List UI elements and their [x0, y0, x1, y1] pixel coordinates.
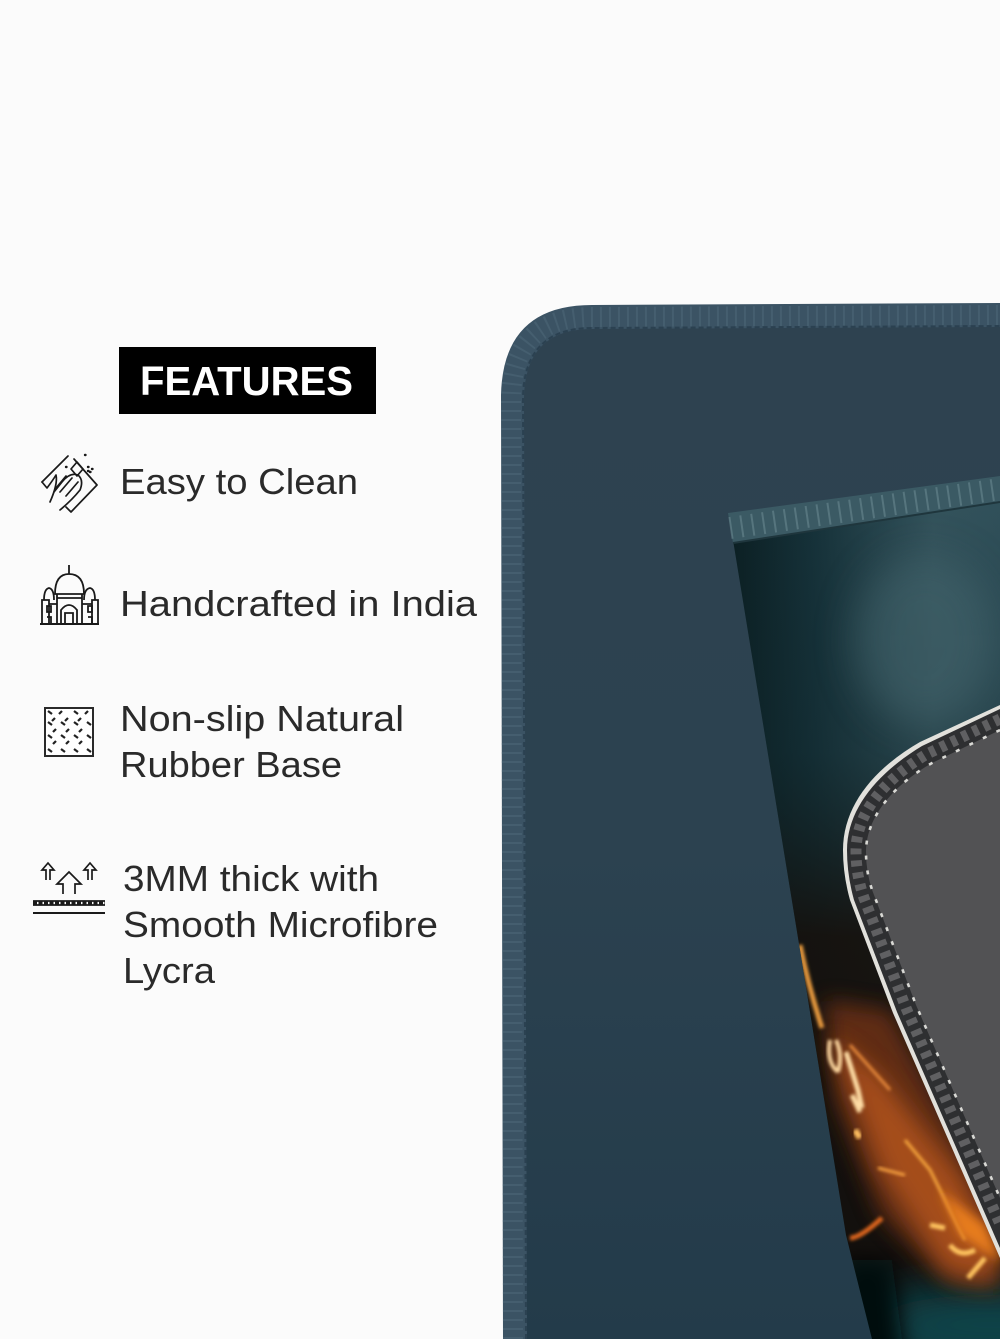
label: 3mm thick with smooth microfibre lycra: 3MM thick with	[123, 858, 379, 899]
feature: handcrafted in India	[40, 565, 478, 624]
feature: 3mm thick	[33, 858, 438, 991]
grey corner surface	[843, 705, 1000, 1258]
icon: thickness arrows and layers	[33, 863, 105, 913]
mat stitched edge	[501, 303, 1000, 1339]
panel: rolled printed pad	[728, 476, 1000, 1339]
label: non-slip natural rubber base: Non-slip Natural	[120, 698, 404, 739]
label: non-slip natural rubber base: Rubber Base	[120, 744, 342, 785]
icon: cleaning hand	[42, 455, 97, 512]
icon: rubber texture square	[45, 708, 93, 756]
label: easy to clean: Easy to Clean	[120, 461, 358, 502]
feature: easy to clean	[42, 455, 358, 512]
icon: Taj Mahal	[40, 565, 99, 624]
panel: large dark blue mat	[501, 303, 1000, 1339]
heading: FEATURES: FEATURES	[140, 358, 353, 404]
label: 3mm thick with smooth microfibre lycra: Smooth Microfibre	[123, 904, 438, 945]
label: handcrafted in India: Handcrafted in India	[120, 583, 478, 624]
panel: orange fire print	[800, 945, 1000, 1290]
feature: non-slip base	[45, 698, 404, 785]
panel: grey folded pad corner	[843, 705, 1000, 1258]
pad stitched top edge	[728, 476, 1000, 543]
pad surface	[733, 500, 1000, 1339]
pad highlight	[840, 555, 1000, 1339]
grey corner stitches	[856, 719, 1000, 1224]
label: 3mm thick with smooth microfibre lycra: Lycra	[123, 950, 216, 991]
heading: FEATURES	[119, 347, 376, 414]
